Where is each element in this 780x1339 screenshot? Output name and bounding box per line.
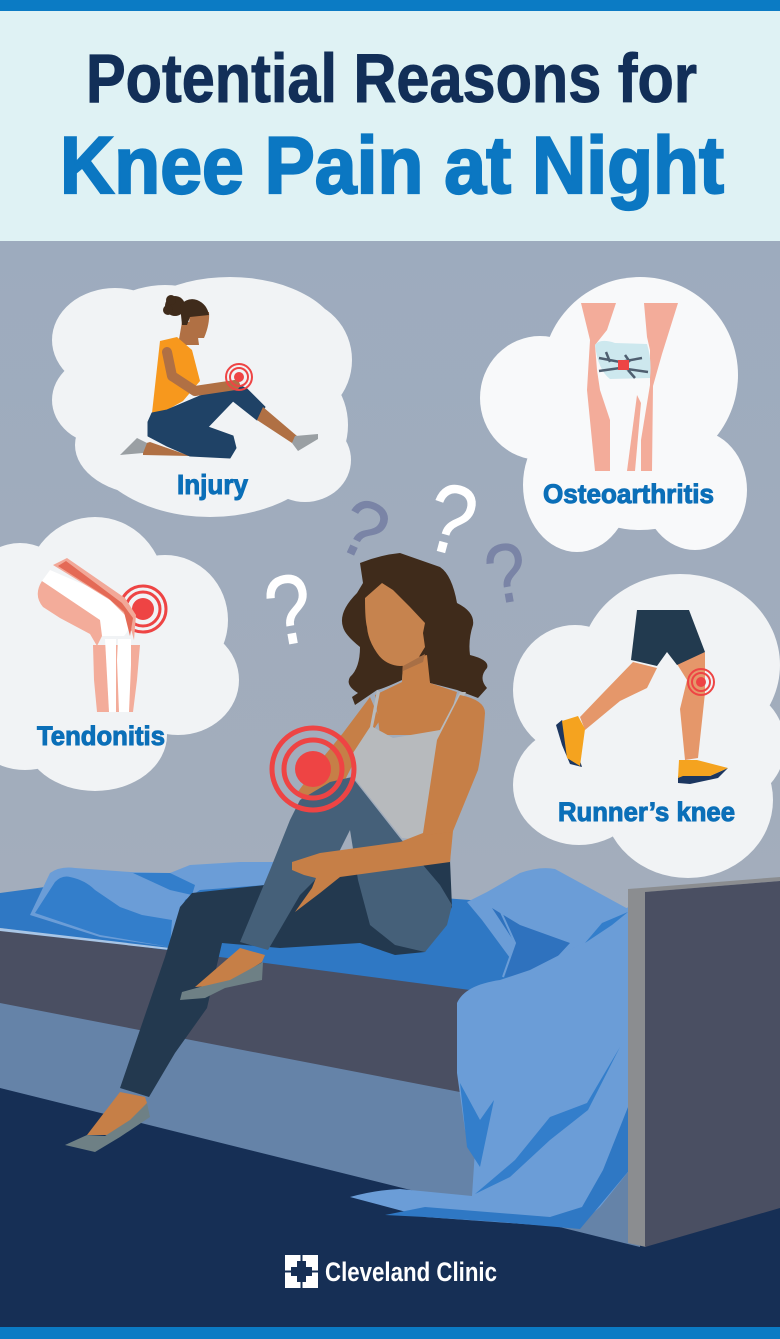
near arm (292, 695, 485, 912)
pillow (30, 862, 275, 947)
pain target (688, 669, 714, 695)
label: injury: Injury (177, 469, 248, 500)
Cleveland Clinic logo (285, 1255, 497, 1288)
pain target (226, 364, 252, 390)
thought cloud: osteoarthritis (480, 277, 747, 552)
osteoarthritis knee illustration (581, 303, 678, 471)
thought cloud: runner's knee (513, 574, 780, 878)
label: runner's knee: Runner’s knee (558, 797, 735, 827)
mattress (0, 928, 480, 1093)
label: osteoarthritis: Osteoarthritis (543, 479, 714, 509)
runner illustration (556, 610, 728, 784)
hair (342, 553, 487, 705)
hand and forearm (292, 832, 452, 912)
question marks: ? (325, 479, 402, 579)
logo mark (285, 1255, 318, 1288)
question marks (257, 462, 534, 668)
title line 2: Knee Pain at Night (60, 121, 724, 211)
blanket (350, 868, 632, 1229)
lower foot (87, 1092, 147, 1135)
far arm (297, 697, 380, 810)
bed (0, 862, 780, 1247)
pain target (272, 728, 354, 810)
floor (0, 1080, 780, 1339)
thought cloud: tendonitis (0, 517, 239, 791)
label: tendonitis: Tendonitis (37, 721, 165, 751)
thought cloud: injury (52, 277, 352, 517)
tendonitis knee illustration (38, 558, 166, 712)
upper foot (195, 948, 265, 987)
header panel (0, 0, 780, 241)
raised leg (240, 777, 452, 952)
neck and chest (375, 655, 457, 735)
face (365, 583, 425, 666)
title line 1: Potential Reasons for (86, 40, 697, 117)
tank top (352, 690, 466, 840)
injury figure (120, 295, 318, 458)
woman sitting on bed (65, 553, 487, 1152)
question marks: ? (414, 462, 487, 579)
question marks: ? (257, 553, 321, 668)
background wall (0, 240, 780, 1100)
question marks: ? (478, 524, 534, 623)
logo wordmark: Cleveland Clinic (325, 1257, 497, 1287)
bottom bar (0, 1327, 780, 1339)
footboard (628, 877, 780, 1247)
back leg (120, 855, 452, 1097)
bed base (0, 998, 640, 1247)
sheet (0, 885, 640, 1000)
